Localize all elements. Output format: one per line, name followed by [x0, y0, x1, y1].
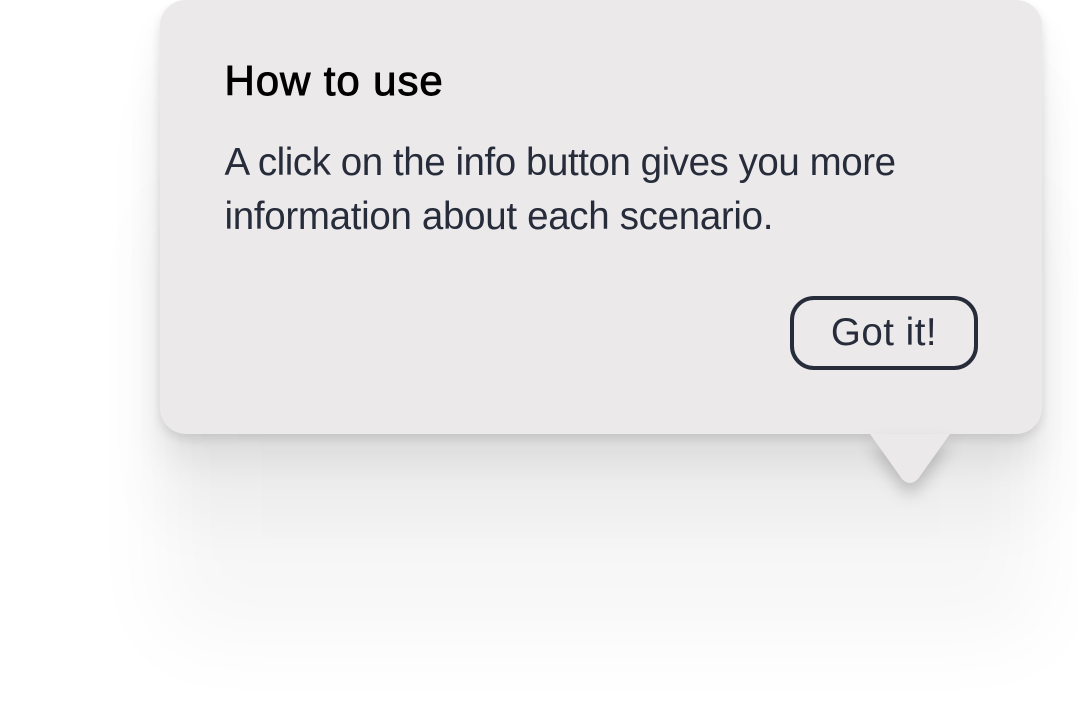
button: got it: Got it!: [831, 311, 937, 354]
heading: How to use: [224, 57, 444, 104]
tooltip pointer: [870, 434, 950, 498]
button: got it: [790, 296, 978, 370]
body text: information about each scenario.: [224, 195, 773, 238]
body text: [224, 141, 896, 238]
body text: A click on the info button gives you more: [224, 141, 896, 184]
tooltip card: [160, 0, 1042, 434]
